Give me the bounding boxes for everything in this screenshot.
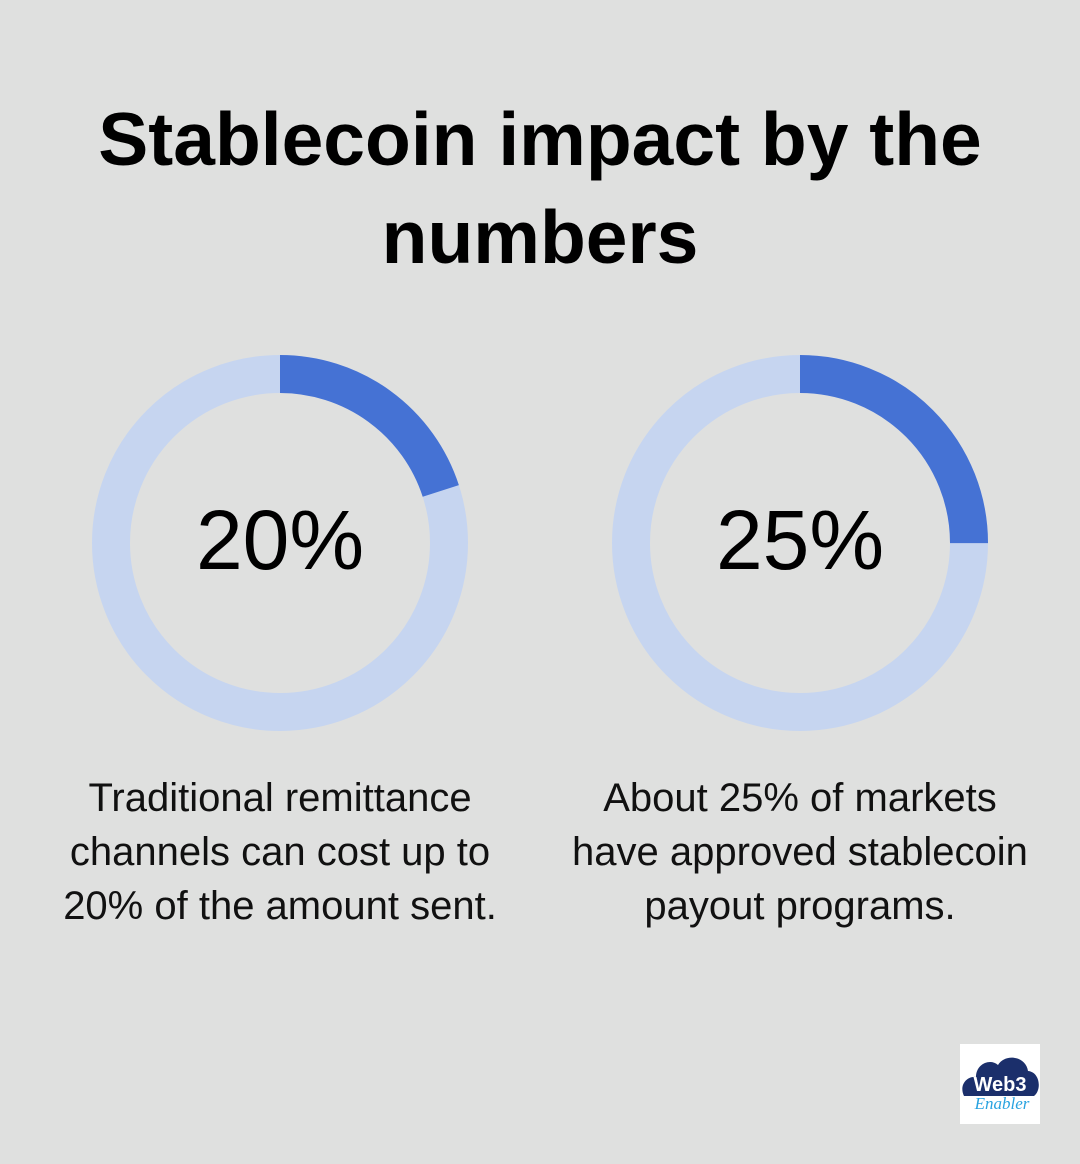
logo: Web3 Enabler: Web3 [974, 1074, 1026, 1096]
caption: remittance: Traditional remittance [88, 776, 472, 820]
caption: markets: About 25% of markets [603, 776, 997, 820]
caption: markets: have approved stablecoin [572, 830, 1028, 874]
number: 25%: 25% [716, 493, 884, 587]
logo: Web3 Enabler [960, 1044, 1040, 1124]
caption: markets [572, 776, 1028, 928]
logo: Web3 Enabler: Enabler [974, 1094, 1030, 1113]
caption: remittance [63, 776, 497, 928]
caption: remittance: channels can cost up to [70, 830, 490, 874]
title [98, 97, 982, 279]
caption: remittance: 20% of the amount sent. [63, 884, 497, 928]
caption: markets: payout programs. [644, 884, 956, 928]
number: 20%: 20% [196, 493, 364, 587]
title: Stablecoin impact by the [98, 97, 982, 181]
title: numbers [382, 195, 698, 279]
donut chart: 20% [92, 355, 468, 731]
donut chart: 25% [612, 355, 988, 731]
